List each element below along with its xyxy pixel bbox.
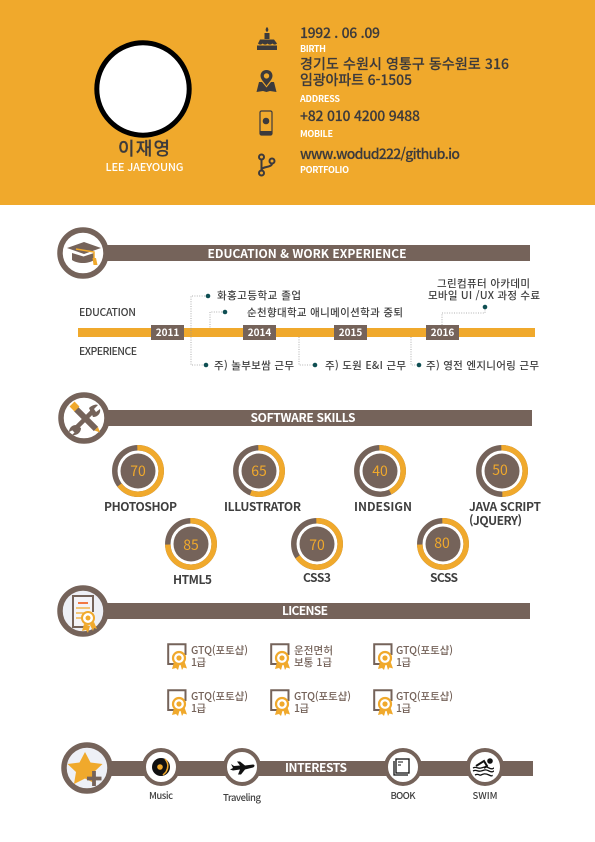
birth text: 1992 . 06 .09 <box>300 23 380 43</box>
license item: GTQ 4 <box>271 689 351 716</box>
mobile text <box>300 106 420 140</box>
donut: css3 70: 70 <box>309 535 325 555</box>
license item: GTQ 5: 1급 <box>396 701 411 716</box>
header background <box>0 0 595 205</box>
donut: scss 80: 80 <box>434 533 450 553</box>
profile photo circle <box>97 43 189 135</box>
license item: GTQ 3: GTQ(포토샵) <box>191 689 248 704</box>
portfolio text: www.wodud222/github.io <box>300 144 460 164</box>
timeline labels: 순천향대학교 애니메이션학과 중퇴 <box>247 305 403 320</box>
skill labels: (JQUERY) <box>469 512 522 529</box>
connectors <box>191 296 205 365</box>
timeline labels: 모바일 UI /UX 과정 수료 <box>428 288 540 303</box>
portfolio text <box>300 144 460 176</box>
timeline labels: 그린컴퓨터 아카데미 <box>437 276 530 291</box>
interest: music <box>144 750 178 802</box>
license item: driver licence <box>271 643 333 670</box>
license item: GTQ 2: 1급 <box>396 655 411 670</box>
license item: GTQ 2 <box>374 643 453 670</box>
icon: certificate <box>60 588 106 634</box>
timeline labels: 주) 놀부보쌈 근무 <box>214 358 294 373</box>
section heading: license: LICENSE <box>282 602 328 619</box>
name: LEE JAEYOUNG <box>106 159 184 175</box>
donut: illustrator 65 <box>236 448 282 494</box>
license item: GTQ 1: GTQ(포토샵) <box>191 643 248 658</box>
donut: html5 85: 85 <box>183 535 199 555</box>
donut: indesign 40 <box>357 448 403 494</box>
section heading: software skills <box>61 395 532 441</box>
interest: swim: SWIM <box>472 788 498 802</box>
interest: book: BOOK <box>390 788 416 802</box>
license item: driver licence: 운전면허 <box>294 643 333 658</box>
birth text: BIRTH <box>300 42 326 55</box>
portfolio text: PORTFOLIO <box>300 163 349 176</box>
license item: driver licence: 보통 1급 <box>294 655 332 670</box>
license item: GTQ 2: GTQ(포토샵) <box>396 643 453 658</box>
interest: traveling: Traveling <box>223 790 262 804</box>
icon: wrench and pencil <box>61 395 107 441</box>
skill labels: HTML5 <box>173 571 212 588</box>
skill labels: CSS3 <box>303 569 331 586</box>
donut: html5 85 <box>168 521 214 567</box>
year markers: 2016 <box>431 324 454 339</box>
icon: star plus <box>64 745 110 791</box>
donut: java script 50 <box>479 448 525 494</box>
donut: java script 50: 50 <box>492 460 508 480</box>
timeline <box>78 276 540 373</box>
icon: graduation cap <box>60 230 106 276</box>
license item: GTQ 5 <box>374 689 453 716</box>
interest: swim <box>468 750 502 802</box>
year markers: 2014 <box>248 324 271 339</box>
name: 이재영 <box>118 135 170 161</box>
interest: book <box>386 750 420 802</box>
address text: 임광아파트 6-1505 <box>300 70 412 90</box>
timeline dots <box>204 294 487 367</box>
section heading: license <box>60 588 530 634</box>
icon: git branch <box>259 154 274 176</box>
license item: GTQ 5: GTQ(포토샵) <box>396 689 453 704</box>
skill labels: JAVA SCRIPT <box>469 498 541 515</box>
address text <box>299 54 509 105</box>
skill labels <box>104 498 541 588</box>
year markers: 2011 <box>156 324 179 339</box>
icon: map pin <box>256 70 276 92</box>
license item: GTQ 1 <box>168 643 248 670</box>
donut: photoshop 70 <box>115 448 161 494</box>
birth text <box>300 23 380 55</box>
interest: music: Music <box>149 788 173 802</box>
mobile text: +82 010 4200 9488 <box>300 106 420 126</box>
timeline labels: 주) 도원 E&I 근무 <box>325 358 406 373</box>
license item: GTQ 4: 1급 <box>294 701 309 716</box>
timeline labels: EDUCATION <box>79 305 136 320</box>
license item: GTQ 3: 1급 <box>191 701 206 716</box>
skill labels: SCSS <box>430 569 458 586</box>
timeline labels: 화홍고등학교 졸업 <box>217 288 301 303</box>
interest: traveling <box>223 750 262 804</box>
timeline labels <box>79 276 540 373</box>
section heading: interests <box>64 745 533 791</box>
section heading: education and work experience: EDUCATION & WORK EXPERIENCE <box>208 245 406 262</box>
mobile text: MOBILE <box>300 127 333 140</box>
license item: GTQ 3 <box>168 689 248 716</box>
timeline labels: EXPERIENCE <box>79 344 137 359</box>
address text: ADDRESS <box>299 92 340 105</box>
section heading: interests: INTERESTS <box>285 759 347 776</box>
timeline labels: 주) 영전 엔지니어링 근무 <box>426 358 539 373</box>
icon: mobile phone <box>260 111 272 135</box>
donut: scss 80 <box>420 521 466 567</box>
year markers: 2015 <box>339 324 362 339</box>
skill labels: ILLUSTRATOR <box>224 498 301 515</box>
skill labels: PHOTOSHOP <box>104 498 177 515</box>
license item: GTQ 1: 1급 <box>191 655 206 670</box>
license item: GTQ 4: GTQ(포토샵) <box>294 689 351 704</box>
icon: birthday cake <box>257 27 277 50</box>
donut: css3 70 <box>294 521 340 567</box>
skill labels: INDESIGN <box>354 498 412 515</box>
name <box>106 135 184 175</box>
address text: 경기도 수원시 영통구 동수원로 316 <box>300 54 509 74</box>
section heading: education and work experience <box>60 230 530 276</box>
donut: indesign 40: 40 <box>372 461 388 481</box>
year markers <box>151 324 459 340</box>
section heading: software skills: SOFTWARE SKILLS <box>250 409 356 426</box>
donut: illustrator 65: 65 <box>251 461 267 481</box>
donut: photoshop 70: 70 <box>130 461 146 481</box>
